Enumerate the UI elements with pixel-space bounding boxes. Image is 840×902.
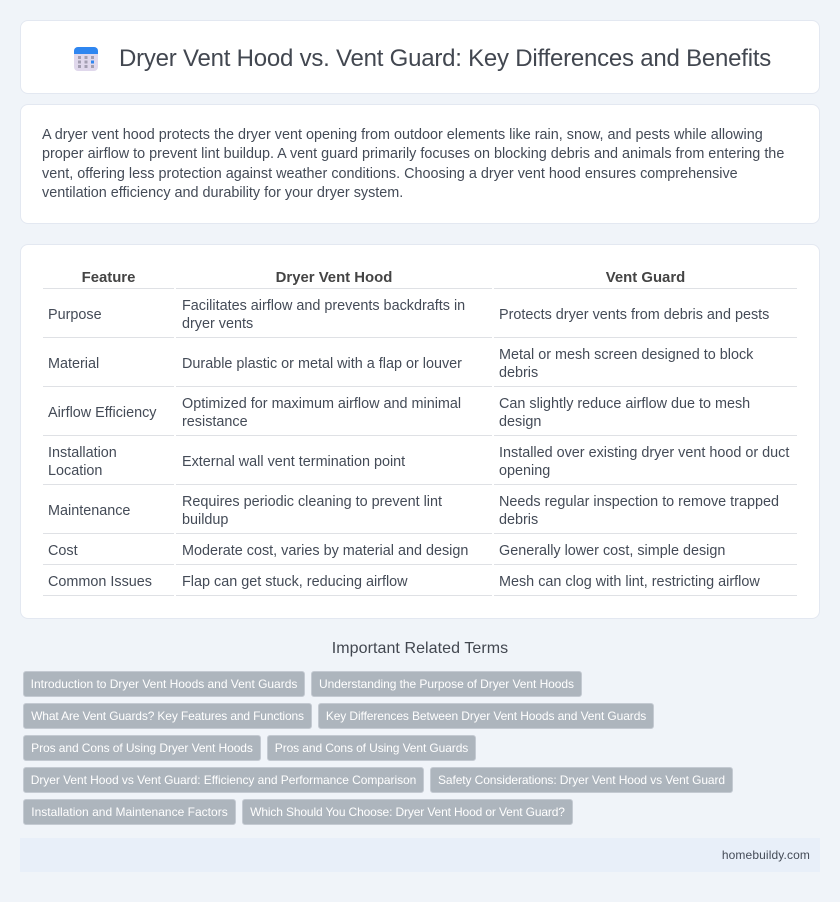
row: maintenance: Requires periodic cleaning to prevent lint xyxy=(182,494,442,510)
row: common issues: Mesh can clog with lint, restricting airflow xyxy=(499,574,760,590)
row: maintenance: Needs regular inspection to remove trapped xyxy=(499,494,779,510)
row: material: debris xyxy=(499,365,538,381)
related term tags: Understanding the Purpose of Dryer Vent Hoods xyxy=(319,677,574,691)
footer xyxy=(20,838,820,872)
row: purpose: Purpose xyxy=(48,307,102,323)
row: cost: Moderate cost, varies by material and design xyxy=(182,543,468,559)
row: maintenance: debris xyxy=(499,512,538,528)
row: installation location: External wall vent termination point xyxy=(182,454,405,470)
related term tags: Pros and Cons of Using Vent Guards xyxy=(275,741,468,755)
related term tags: Dryer Vent Hood vs Vent Guard: Efficiency and Performance Comparison xyxy=(31,773,416,787)
row: purpose xyxy=(48,298,769,332)
intro text: A dryer vent hood protects the dryer vent opening from outdoor elements like rain, snow, and pests while allowing xyxy=(42,127,763,143)
row: maintenance: Maintenance xyxy=(48,503,130,519)
row: purpose: Protects dryer vents from debris and pests xyxy=(499,307,769,323)
row: material xyxy=(48,347,754,381)
related term tags: Introduction to Dryer Vent Hoods and Vent Guards xyxy=(31,677,297,691)
related term tags: Which Should You Choose: Dryer Vent Hood or Vent Guard? xyxy=(250,805,565,819)
panel: intro xyxy=(20,104,820,224)
row: cost: Cost xyxy=(48,543,78,559)
title: Dryer Vent Hood vs. Vent Guard: Key Differences and Benefits xyxy=(119,45,771,72)
row: installation location: opening xyxy=(499,463,550,479)
row: installation location xyxy=(48,445,790,479)
row: material: Material xyxy=(48,356,99,372)
row: common issues: Common Issues xyxy=(48,574,152,590)
row: maintenance xyxy=(48,494,779,528)
row: installation location: Location xyxy=(48,463,102,479)
intro text xyxy=(42,127,784,201)
row: material: Metal or mesh screen designed to block xyxy=(499,347,753,363)
table header: Vent Guard xyxy=(606,270,685,286)
row: installation location: Installation xyxy=(48,445,117,461)
header card xyxy=(20,20,820,94)
row: purpose: Facilitates airflow and prevents backdrafts in xyxy=(182,298,465,314)
row: airflow efficiency: Can slightly reduce airflow due to mesh xyxy=(499,396,750,412)
related term tags: Pros and Cons of Using Dryer Vent Hoods xyxy=(31,741,253,755)
row: maintenance: buildup xyxy=(182,512,228,528)
intro text: proper airflow to prevent lint buildup. A vent guard primarily focuses on blocking debris and animals from entering the xyxy=(42,146,784,162)
heading: important related terms: Important Related Terms xyxy=(332,640,508,657)
comparison table xyxy=(43,270,797,596)
icon: calendar xyxy=(74,47,98,71)
row: cost xyxy=(48,543,725,559)
table header: Feature xyxy=(82,270,135,286)
related term tags: Safety Considerations: Dryer Vent Hood vs Vent Guard xyxy=(438,773,725,787)
intro text: ventilation efficiency and durability for your dryer system. xyxy=(42,185,403,201)
related term tags: What Are Vent Guards? Key Features and Functions xyxy=(31,709,304,723)
table header xyxy=(82,270,685,286)
row: airflow efficiency: Airflow Efficiency xyxy=(48,405,156,421)
row: airflow efficiency: design xyxy=(499,414,541,430)
row: common issues: Flap can get stuck, reducing airflow xyxy=(182,574,408,590)
related term tags: Installation and Maintenance Factors xyxy=(31,805,228,819)
related term tags: Key Differences Between Dryer Vent Hoods and Vent Guards xyxy=(326,709,646,723)
row: cost: Generally lower cost, simple design xyxy=(499,543,725,559)
footer source text: homebuildy.com xyxy=(722,848,810,862)
row: common issues xyxy=(48,574,760,590)
row: airflow efficiency xyxy=(48,396,750,430)
row: material: Durable plastic or metal with a flap or louver xyxy=(182,356,462,372)
row: purpose: dryer vents xyxy=(182,316,253,332)
row: installation location: Installed over existing dryer vent hood or duct xyxy=(499,445,789,461)
intro text: vent, offering less protection against weather conditions. Choosing a dryer vent hood ensures comprehensive xyxy=(42,166,738,182)
table header: Dryer Vent Hood xyxy=(276,270,392,286)
row: airflow efficiency: resistance xyxy=(182,414,248,430)
panel: comparison table xyxy=(20,244,820,619)
related term tags xyxy=(23,671,733,825)
row: airflow efficiency: Optimized for maximum airflow and minimal xyxy=(182,396,461,412)
